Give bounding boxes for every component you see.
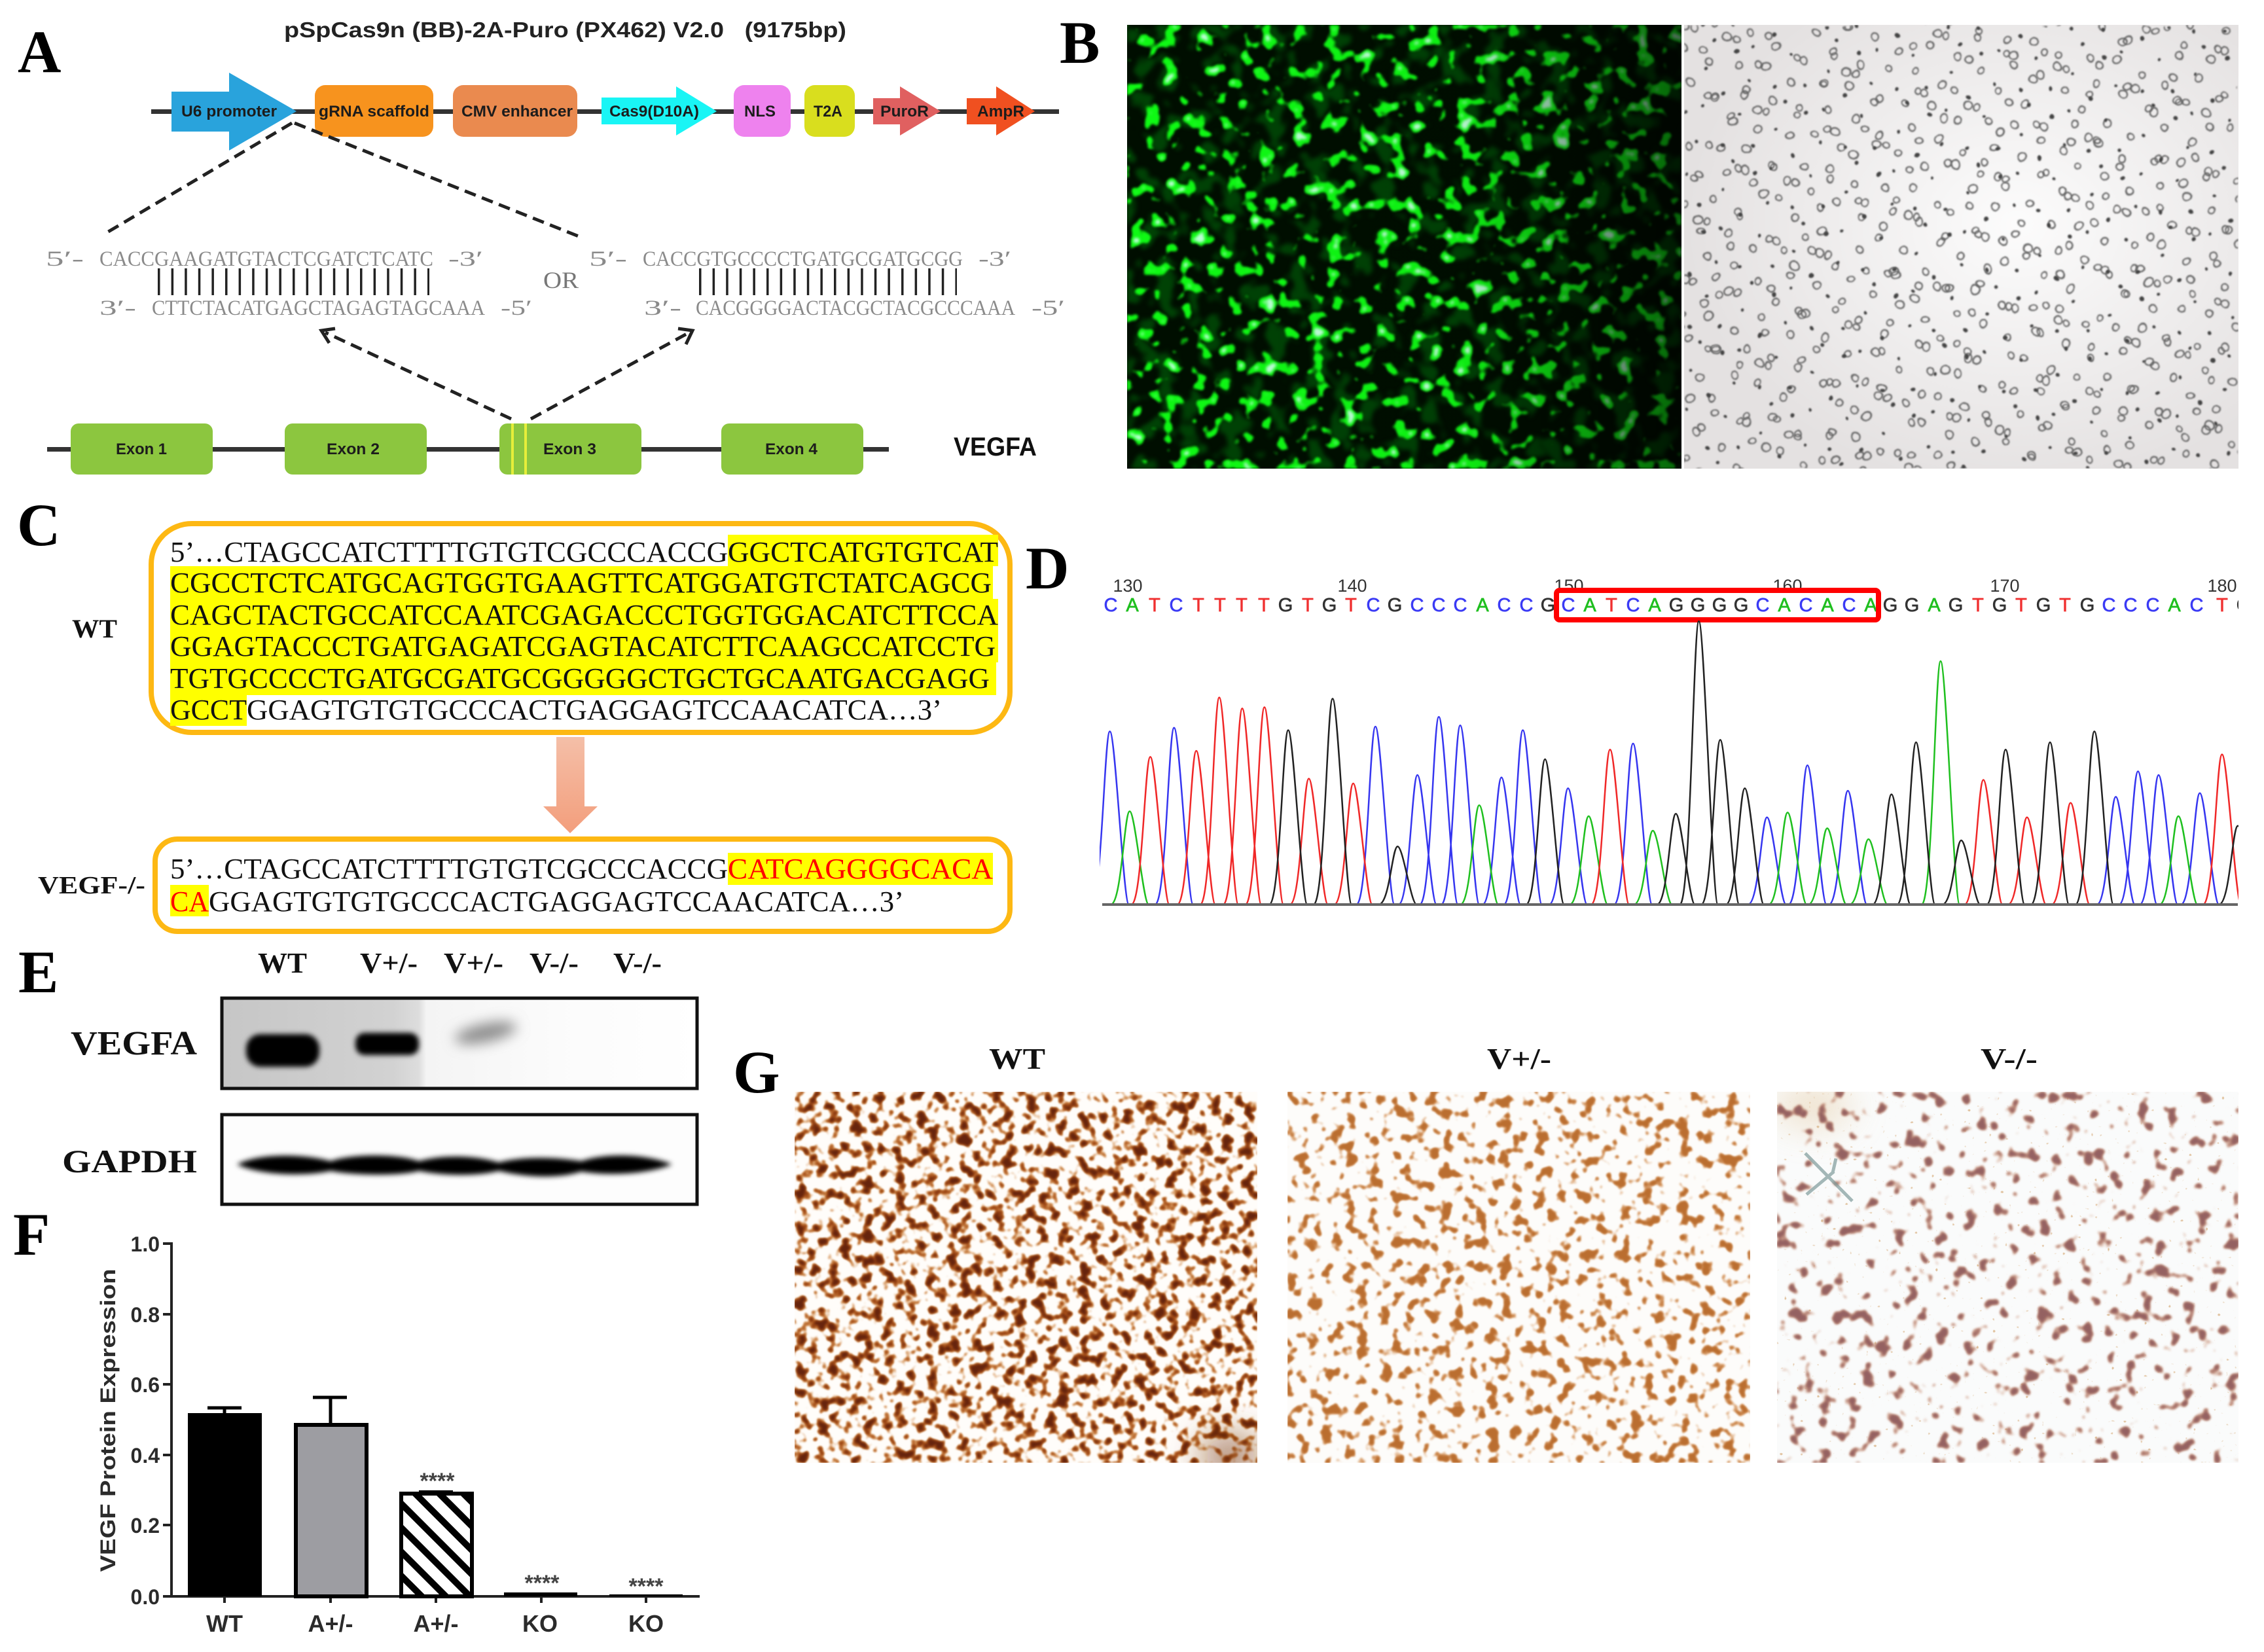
panel label A: A [18, 18, 61, 85]
panel label C: C [17, 492, 60, 558]
WT stained cells image [795, 1092, 1260, 1476]
knockout row label: VEGF-/- [38, 872, 145, 899]
panel G: immunostaining [795, 1042, 2238, 1476]
panel C: sequences [38, 524, 1010, 931]
significance stars [420, 1469, 664, 1599]
base calls: C A T C TTTT G T G T C G CCC A CC G C A T C A GGGG C A C A C A GG A G T G T G T G CCC A C T G [1104, 595, 2251, 616]
gRNA scaffold block: gRNA scaffold [319, 103, 429, 120]
WT sequence text [170, 536, 998, 726]
bar A+/- hatched [401, 1490, 472, 1596]
WT sequence text: 5’…CTAGCCATCTTTTGTGTCGCCCACCG [170, 536, 728, 568]
guide sequence 1 bottom strand: CTTCTACATGAGCTAGAGTAGCAAA [152, 296, 485, 320]
WT sequence text: CAGCTACTGCCATCCAATCGAGACCCTGGTGGACATCTTCCA [170, 599, 998, 631]
panel F: bar chart [96, 1232, 700, 1637]
CMV enhancer block: CMV enhancer [461, 103, 573, 120]
T2A block [804, 85, 855, 137]
T2A block: T2A [814, 103, 842, 120]
GAPDH blot [222, 1115, 697, 1204]
guide sequence 2 top strand: CACCGTGCCCCTGATGCGATGCGG [643, 247, 963, 271]
CMV enhancer block [453, 85, 577, 137]
lane labels: V-/- [530, 947, 579, 979]
OR text: OR [543, 267, 579, 293]
exon 2 [285, 423, 427, 475]
y-axis numbers: 0.8 [131, 1303, 160, 1327]
chromatogram baseline [1102, 903, 2238, 906]
x-axis labels: WT [206, 1610, 243, 1637]
x-axis labels: KO [522, 1610, 558, 1637]
y-axis numbers: 1.0 [131, 1232, 160, 1256]
knockout sequence text: GGAGTGTGTGCCCACTGAGGAGTCCAACATCA…3’ [209, 886, 904, 918]
y-axis numbers: 0.0 [131, 1585, 160, 1609]
exon 2: Exon 2 [327, 440, 380, 458]
NLS block [734, 85, 791, 137]
gene line [47, 447, 889, 452]
dashed insertion lines [103, 123, 579, 236]
down arrow [543, 737, 598, 833]
exon 3 with target sites: Exon 3 [543, 440, 596, 458]
column labels: V+/- [1487, 1042, 1551, 1075]
Cas9 D10A arrow [602, 86, 717, 135]
bar A+/- grey [296, 1397, 367, 1596]
bar KO 1 [504, 1592, 577, 1596]
guide 2 base pair ticks [699, 268, 957, 295]
panel B: fluorescence microscopy image [1127, 25, 1681, 469]
x-axis labels: A+/- [413, 1610, 459, 1637]
column labels: WT [989, 1042, 1045, 1075]
panel label E: E [18, 939, 58, 1005]
WT sequence text: CGCCTCTCATGCAGTGGTGAAGTTCATGGATGTCTATCAGCG [170, 567, 992, 599]
panel D: sequencing chromatogram [1091, 576, 2257, 906]
x-axis labels: KO [628, 1610, 664, 1637]
guide sequence 2 bottom strand: 3′- [644, 296, 681, 320]
V-/- stained cells image [1774, 1086, 2238, 1463]
panel E: western blot [62, 947, 697, 1204]
GAPDH label: GAPDH [62, 1143, 197, 1179]
V+/- stained cells image [1287, 1092, 1750, 1463]
knockout sequence text: CA [170, 886, 209, 918]
WT sequence text: TGTGCCCCTGATGCGATGCGGGGGCTGCTGCAATGACGAGG [170, 662, 990, 694]
panel label D: D [1026, 535, 1069, 602]
position numbers: 140 [1337, 576, 1367, 596]
exon 1 [71, 423, 213, 475]
axes and ticks [163, 1242, 700, 1603]
guide sequence 1 bottom strand: 3′- [99, 296, 136, 320]
column labels [989, 1042, 2038, 1075]
knockout yellow highlight [170, 853, 993, 916]
exon 3 with target sites [499, 423, 641, 475]
significance stars: **** [629, 1574, 664, 1599]
knockout sequence text [170, 853, 993, 918]
guide sequence 1 top strand: 5′- [46, 247, 84, 271]
lane labels: V-/- [613, 947, 662, 979]
knockout sequence text: CATCAGGGGCACA [728, 853, 993, 885]
guide sequence 1 bottom strand: -5′ [501, 296, 532, 320]
panel label B: B [1060, 9, 1100, 76]
exon 4: Exon 4 [765, 440, 818, 458]
guide sequence 2 bottom strand: CACGGGGACTACGCTACGCCCAAA [696, 296, 1015, 320]
guide sequence 2 top strand: -3′ [979, 247, 1011, 271]
position numbers: 150 [1554, 576, 1584, 596]
guide sequence 2 bottom strand: -5′ [1032, 296, 1065, 320]
lane labels: V+/- [360, 947, 418, 979]
knockout sequence text: 5’…CTAGCCATCTTTTGTGTCGCCCACCG [170, 853, 728, 885]
position numbers [1114, 579, 2236, 592]
WT row label: WT [72, 614, 117, 643]
knockout sequence box [155, 839, 1010, 931]
WT sequence text: GGAGTGTGTGCCCACTGAGGAGTCCAACATCA…3’ [247, 694, 942, 726]
lane labels: V+/- [444, 947, 503, 979]
U6 promoter arrow [171, 73, 296, 151]
chromatogram traces [1091, 621, 2257, 905]
y-axis numbers [131, 1232, 160, 1609]
gRNA scaffold block [315, 85, 433, 137]
WT sequence text: GGAGTACCCTGATGAGATCGAGTACATCTTCAAGCCATCCTG [170, 630, 996, 662]
PuroR arrow: PuroR [880, 103, 929, 120]
VEGFA blot [222, 998, 697, 1088]
plasmid backbone line [151, 109, 1059, 114]
position numbers: 130 [1113, 576, 1143, 596]
guide sequence 1 top strand: CACCGAAGATGTACTCGATCTCATC [99, 247, 433, 271]
y-axis numbers: 0.4 [131, 1444, 160, 1467]
guide sequence 2 top strand: 5′- [589, 247, 627, 271]
position numbers: 160 [1772, 576, 1803, 596]
column labels: V-/- [1981, 1042, 2038, 1075]
y-axis numbers: 0.2 [131, 1514, 160, 1537]
exon 4 [721, 423, 863, 475]
position numbers: 180 [2207, 576, 2237, 596]
Cas9 D10A arrow: Cas9(D10A) [609, 103, 699, 120]
U6 promoter arrow: U6 promoter [181, 103, 277, 120]
VEGFA label: VEGFA [71, 1025, 197, 1062]
bar KO 2 [609, 1594, 683, 1596]
AmpR arrow [967, 86, 1035, 135]
y-axis title: VEGF Protein Expression [96, 1268, 120, 1572]
position numbers: 170 [1990, 576, 2020, 596]
x-axis labels: A+/- [308, 1610, 353, 1637]
VEGFA gene name: VEGFA [954, 433, 1037, 461]
WT sequence text: GCCT [170, 694, 247, 726]
guide 1 base pair ticks [158, 268, 429, 295]
x-axis labels [206, 1610, 664, 1637]
lane labels: WT [258, 947, 307, 979]
bar WT [188, 1408, 262, 1596]
panel A: vector map and guide design [46, 18, 1065, 475]
panel label G: G [733, 1039, 780, 1105]
NLS block: NLS [744, 103, 776, 120]
significance stars: **** [525, 1571, 560, 1596]
PuroR arrow [873, 86, 941, 135]
WT sequence text: GGCTCATGTGTCAT [728, 536, 998, 568]
panel B: bright-field microscopy image [1684, 25, 2238, 469]
lane labels [258, 947, 662, 979]
y-axis numbers: 0.6 [131, 1373, 160, 1397]
AmpR arrow: AmpR [977, 103, 1024, 120]
significance stars: **** [420, 1469, 455, 1494]
plasmid title: pSpCas9n (BB)-2A-Puro (PX462) V2.0 (9175bp) [284, 18, 846, 42]
dashed arrow to guide 2 [531, 329, 692, 419]
highlighted region box [1556, 590, 1878, 620]
exon 1: Exon 1 [116, 440, 167, 458]
guide sequence 1 top strand: -3′ [448, 247, 483, 271]
WT yellow highlight [170, 535, 998, 726]
WT sequence box [151, 524, 1010, 732]
panel label F: F [13, 1201, 50, 1268]
dashed arrow to guide 1 [321, 329, 511, 419]
